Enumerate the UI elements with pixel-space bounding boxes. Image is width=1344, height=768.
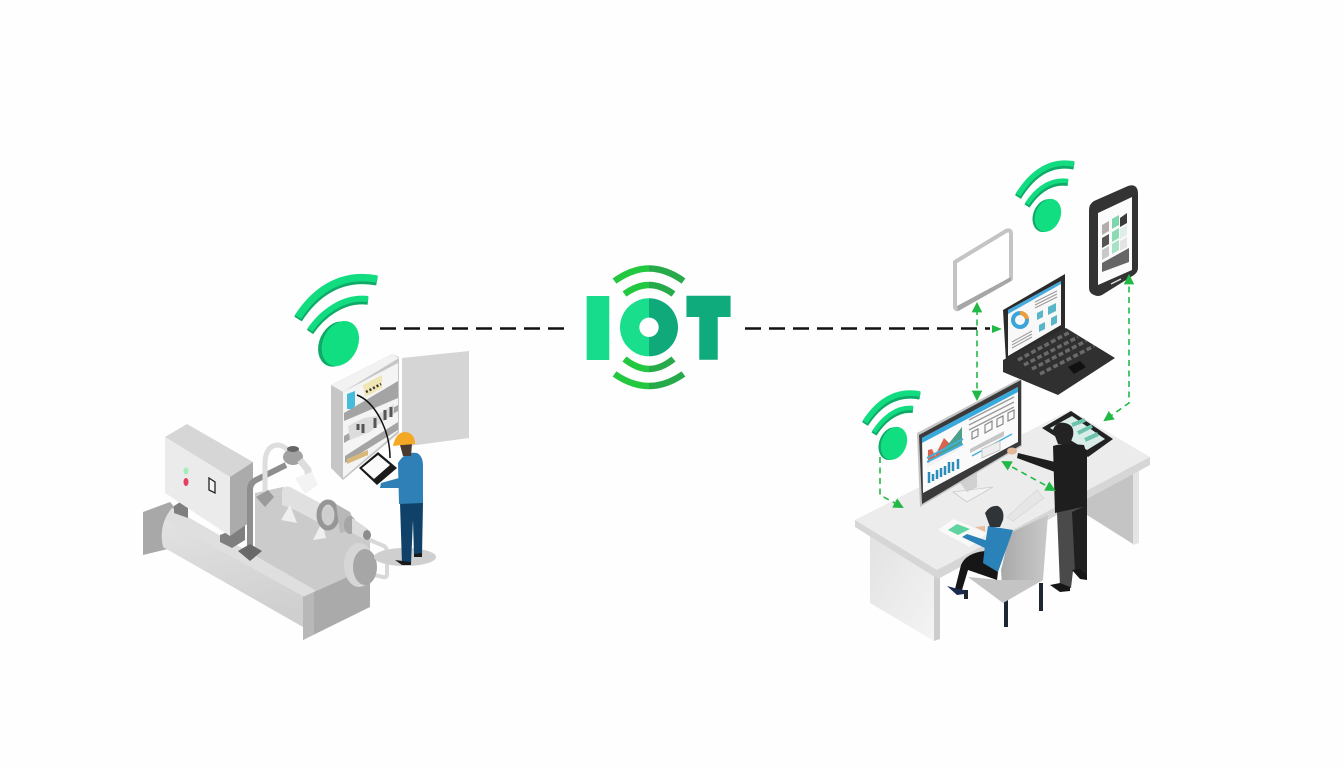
left foot — [143, 502, 176, 555]
hand — [1007, 448, 1017, 454]
breakers — [348, 404, 394, 440]
cable — [357, 395, 390, 458]
letter T: T — [691, 288, 726, 370]
screen icons — [972, 410, 1014, 439]
worker — [359, 432, 436, 566]
dashboard tiles — [1037, 303, 1057, 332]
wifi icon: cabinet — [298, 278, 377, 373]
letter I: I — [586, 283, 610, 373]
legs — [955, 551, 998, 590]
torso — [1053, 444, 1087, 513]
phone screen — [1098, 197, 1132, 285]
monitor bezel — [917, 379, 1022, 507]
donut chart — [1013, 313, 1027, 327]
shoes — [395, 553, 422, 565]
head — [1053, 423, 1073, 444]
red indicator — [184, 478, 188, 486]
screen blue rows — [927, 439, 963, 462]
smartphone — [1089, 185, 1138, 296]
motor section — [255, 487, 370, 607]
legs — [400, 503, 423, 564]
terminal block — [363, 375, 382, 397]
laptop lid — [1003, 274, 1065, 362]
blue module — [347, 391, 355, 409]
phone tiles — [1102, 213, 1129, 272]
hand arm — [975, 526, 985, 532]
connection line: cabinet wifi to IOT — [380, 327, 568, 330]
chair legs — [966, 583, 1041, 627]
keyboard — [1007, 490, 1044, 521]
arm — [380, 478, 402, 488]
area chart — [927, 436, 962, 468]
screen mini widgets — [982, 441, 1000, 458]
shelves — [344, 381, 398, 463]
torso — [398, 453, 423, 504]
keyboard keys — [1018, 332, 1094, 374]
letter O: signal ring — [620, 298, 678, 356]
phone button — [1111, 279, 1121, 284]
desk tablet — [1042, 411, 1113, 457]
laptop text rows — [1012, 291, 1057, 348]
control box — [165, 424, 253, 536]
cabinet interior — [343, 363, 398, 478]
end flange — [344, 543, 377, 587]
desk — [855, 410, 1150, 641]
standing man — [1007, 423, 1087, 592]
hard hat — [393, 432, 415, 446]
connection line: IOT to laptop — [745, 325, 1002, 333]
laptop base — [1003, 328, 1115, 395]
office chair — [966, 515, 1048, 627]
green data links — [880, 276, 1129, 507]
monitor screen — [922, 387, 1018, 493]
wifi icon: mobile devices — [1018, 163, 1074, 236]
signal arcs — [614, 268, 684, 386]
arm — [1017, 450, 1065, 472]
monitor stand — [953, 470, 993, 502]
floor shadow — [374, 548, 436, 566]
cabinet frame — [331, 354, 399, 480]
cabinet door — [402, 351, 469, 447]
right desk leg — [1087, 469, 1139, 545]
laptop — [1003, 274, 1115, 395]
screen header — [922, 387, 1018, 443]
right foot — [303, 567, 370, 640]
display — [209, 478, 215, 493]
link: tablet and monitor — [976, 304, 978, 399]
shoe — [947, 586, 964, 595]
link: phone and desk tablet — [1105, 276, 1129, 420]
tablet device — [955, 230, 1011, 311]
chair back — [1001, 515, 1048, 602]
pipe assembly — [238, 445, 318, 561]
desktop monitor — [917, 379, 1022, 507]
chair seat — [968, 577, 1043, 603]
chiller machine — [143, 424, 387, 640]
compressor — [281, 486, 371, 540]
green indicator — [184, 468, 188, 474]
control box mounts — [174, 497, 245, 548]
legs — [1057, 505, 1087, 588]
head — [985, 506, 1003, 527]
shoes — [1050, 569, 1087, 592]
control cabinet — [331, 351, 469, 480]
main cylinder — [162, 508, 315, 632]
tablet — [359, 452, 397, 485]
seated man — [947, 506, 1013, 595]
oil loop pipe — [370, 540, 387, 577]
IOT logo — [586, 268, 726, 386]
terminal rail — [347, 450, 368, 464]
left desk leg — [870, 535, 940, 641]
torso — [983, 526, 1013, 572]
arm — [962, 534, 988, 549]
laptop screen — [1008, 281, 1061, 356]
wifi icon: desk — [865, 393, 920, 464]
text rows on screen — [969, 397, 1014, 430]
bar chart — [929, 459, 958, 483]
link: monitor and standing man — [1003, 462, 1054, 490]
link: wifi and desk — [880, 457, 902, 507]
desk top — [855, 410, 1150, 570]
paper with green sheet — [938, 519, 987, 547]
screen gray band — [970, 431, 1004, 453]
trackpad — [1068, 361, 1086, 374]
head — [400, 444, 412, 456]
